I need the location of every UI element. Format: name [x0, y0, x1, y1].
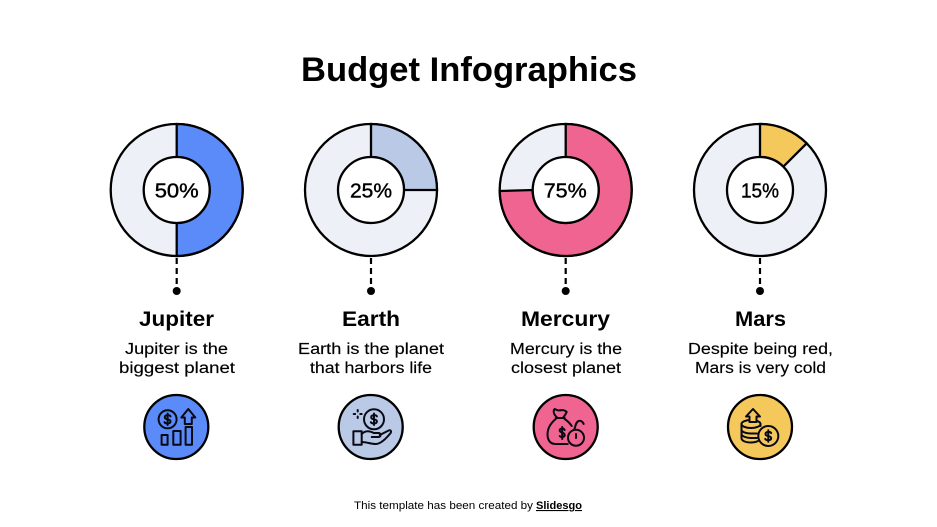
panel: Jupiter [111, 124, 243, 459]
panel: Earth [298, 124, 445, 459]
donut chart: 75% [500, 124, 632, 256]
footer credit: This template has been created by [354, 500, 534, 512]
description: that harbors life [310, 360, 432, 377]
donut chart: 15% [694, 124, 826, 256]
connector [562, 258, 570, 295]
description [119, 341, 236, 377]
description [688, 341, 833, 377]
donut chart: 25% [305, 124, 437, 256]
donut chart: 50%: 50% [155, 180, 199, 202]
donut chart: 15%: 15% [741, 180, 779, 202]
panel: Mars [688, 124, 833, 459]
donut chart: 25%: 25% [350, 180, 392, 202]
heading: Jupiter [139, 308, 214, 331]
icon: money bag and stopwatch [534, 395, 598, 459]
description: Jupiter is the [125, 341, 228, 358]
heading: Mercury [521, 308, 610, 331]
connector [367, 258, 375, 295]
title: Budget Infographics [301, 51, 637, 89]
description: Earth is the planet [298, 341, 445, 358]
connector [173, 258, 181, 295]
description: Despite being red, [688, 341, 833, 358]
description: Mars is very cold [695, 360, 826, 377]
heading: Earth [342, 308, 400, 331]
description: Mercury is the [510, 341, 622, 358]
donut chart: 75%: 75% [544, 180, 587, 202]
icon: coin and growth bars [144, 395, 208, 459]
description [298, 341, 445, 377]
description: biggest planet [119, 360, 236, 377]
panel: Mercury [500, 124, 632, 459]
footer credit: Slidesgo [536, 500, 582, 512]
description [510, 341, 622, 377]
icon: hand holding coin [339, 395, 403, 459]
description: closest planet [511, 360, 622, 377]
heading: Mars [735, 308, 786, 331]
donut chart: 50% [111, 124, 243, 256]
icon: coin stack with arrow [728, 395, 792, 459]
connector [756, 258, 764, 295]
